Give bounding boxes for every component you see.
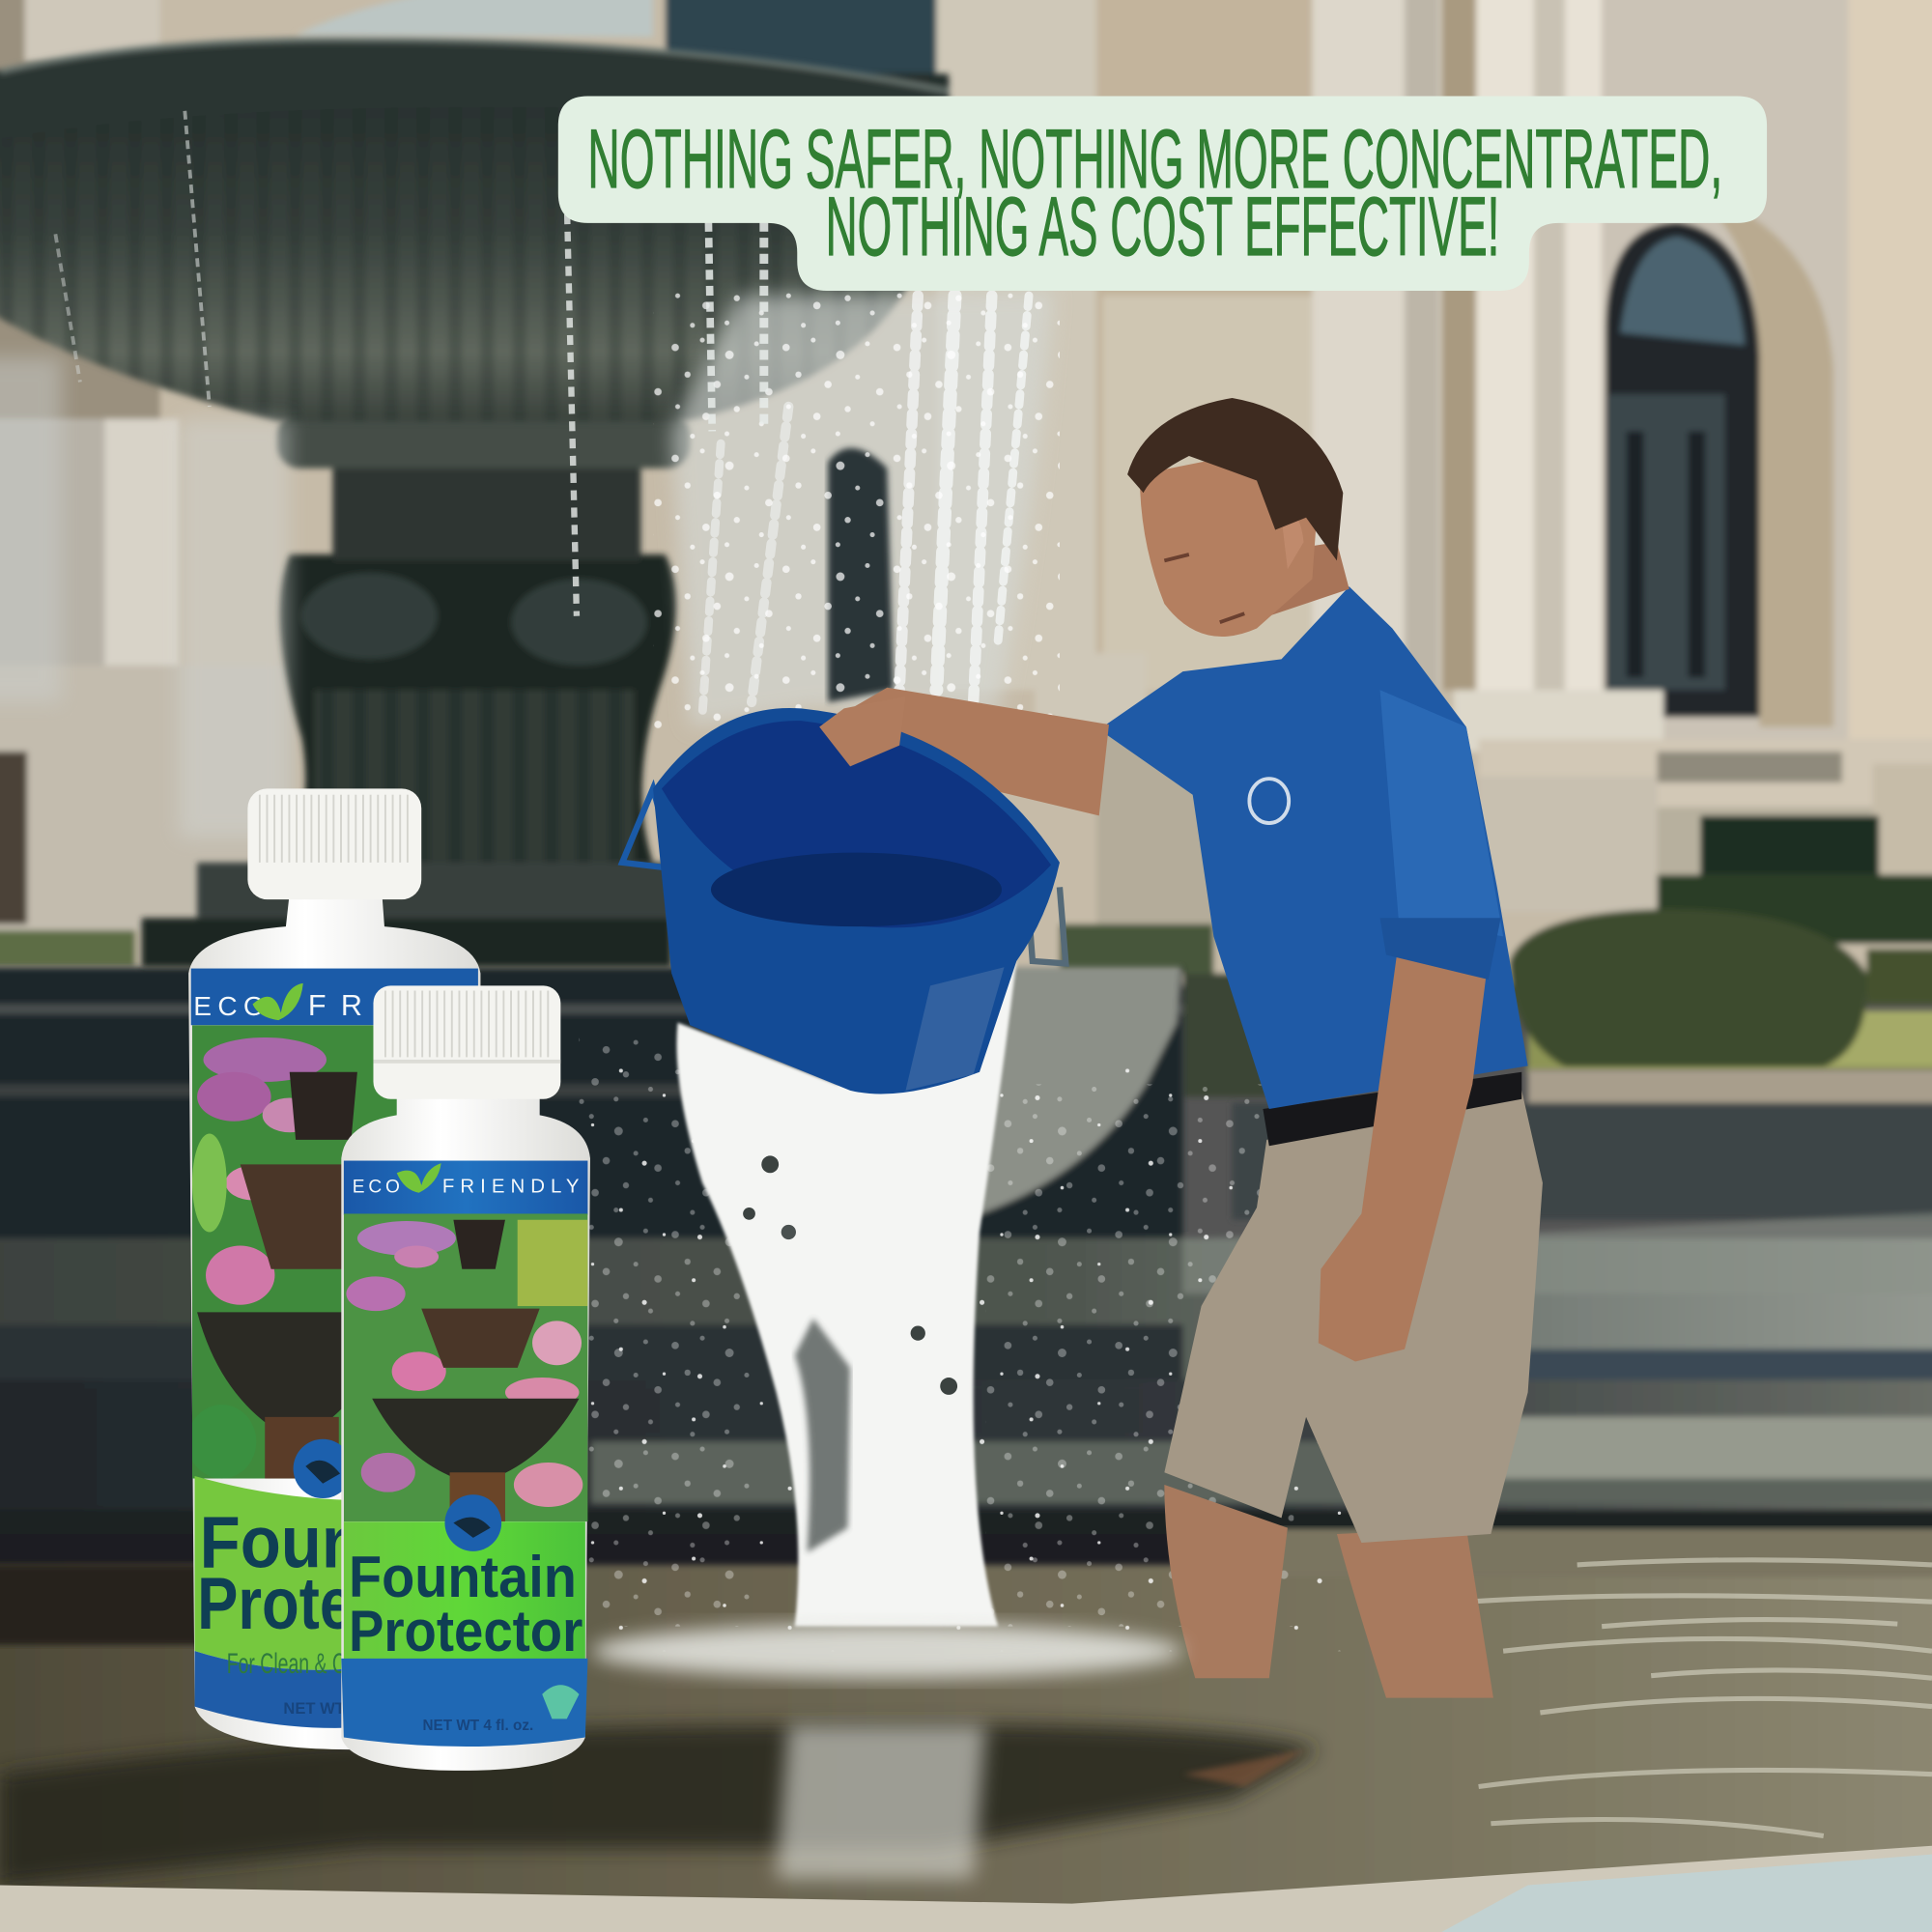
label text: net weight: NET WT 4 fl. oz. xyxy=(423,1718,533,1734)
neck and head xyxy=(1127,398,1350,637)
pavement xyxy=(0,1846,1932,1932)
fountain bowl xyxy=(0,0,950,421)
waterfall from bucket xyxy=(591,961,1182,1678)
product bottle: small: FRIENDLY xyxy=(442,1177,587,1198)
label text: eco friendly: ECO xyxy=(353,1178,404,1198)
shirt logo xyxy=(1249,779,1289,823)
product bottle: large xyxy=(187,788,480,1749)
lower arm xyxy=(1319,943,1488,1361)
headline banner xyxy=(558,96,1767,291)
hedges and lawn xyxy=(0,815,1932,1096)
falling water behind the man xyxy=(0,111,1060,838)
legs xyxy=(1164,1485,1493,1698)
label text: large bottle name: Foun xyxy=(200,1501,362,1583)
polo shirt xyxy=(1099,586,1528,1109)
product bottle: large: FR xyxy=(308,989,377,1022)
label text: eco friendly: ECO xyxy=(193,991,270,1021)
background: classical building xyxy=(0,0,1932,1096)
product bottle: large: Prote xyxy=(197,1563,354,1645)
man pouring bucket xyxy=(819,398,1543,1698)
fountain upper tier xyxy=(0,0,950,967)
brand mark xyxy=(542,1685,579,1719)
label text: fountain protector: Fountain xyxy=(349,1545,577,1609)
label text: fountain protector: Protector xyxy=(349,1599,582,1663)
label text: fountain protector xyxy=(349,1545,582,1663)
arm holding bucket xyxy=(819,688,1109,815)
pool water xyxy=(0,1528,1932,1932)
headline text xyxy=(587,112,1722,273)
fountain stem and pedestal xyxy=(142,412,690,967)
fountain lower basin and rim xyxy=(0,967,1932,1596)
product bottle: small xyxy=(341,985,590,1771)
shorts xyxy=(1164,1091,1543,1543)
blue bucket xyxy=(622,696,1065,1094)
water spray xyxy=(542,1035,1405,1651)
belt xyxy=(1263,1072,1521,1146)
product bottle: large: NET WT xyxy=(283,1699,345,1718)
product bottle: large: For Clean & Cl xyxy=(227,1648,350,1680)
